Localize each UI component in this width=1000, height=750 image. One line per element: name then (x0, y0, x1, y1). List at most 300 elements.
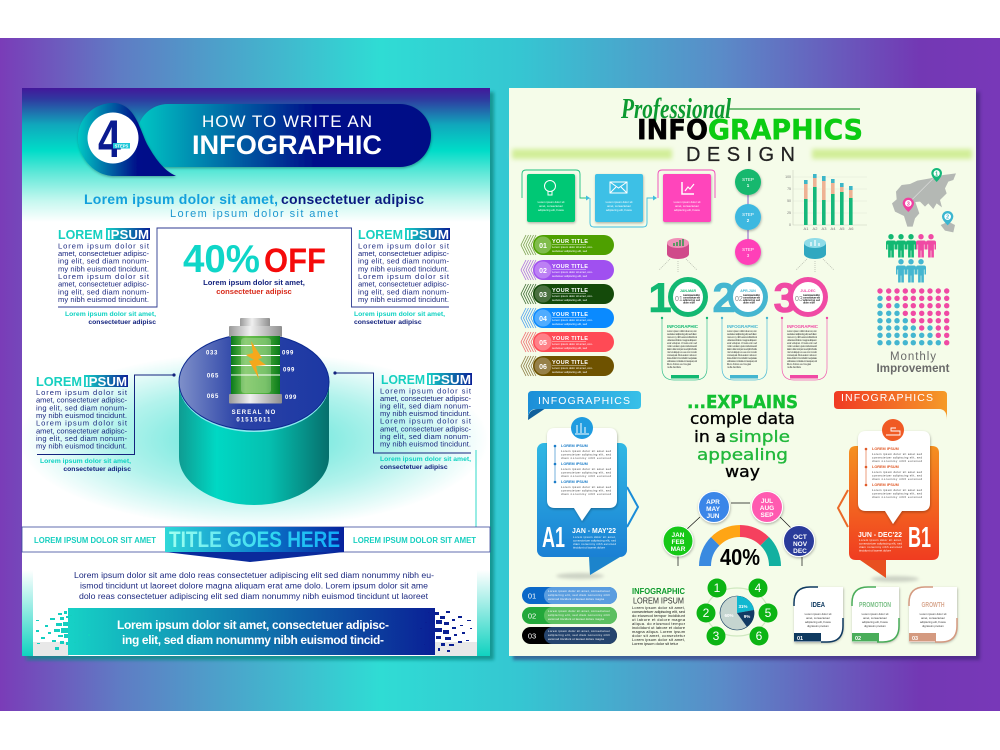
quarter bubbles and gauge: OCT (793, 534, 807, 541)
title band: LOREM IPSUM DOLOR SIT AMET (34, 536, 156, 545)
bar chart (785, 170, 867, 231)
leaf card: growth: amet, consectetuer (921, 616, 945, 620)
pie with six circles: 3 (713, 629, 720, 643)
card: A1: LOREM IPSUM (561, 480, 588, 484)
text block: middle right: amet, consectetuer adipisc- (380, 424, 471, 433)
card: B1: consectetuer adipiscing elit, sed (872, 492, 922, 496)
timeline cards: consequat. Duis autem vel eum (787, 353, 818, 357)
numbered list pills: euismod tincidunt ut laoreet dolore magna (548, 637, 604, 641)
steps: STEP (742, 247, 754, 252)
timeline cards: nisl ut aliquip ex ea commodo (727, 350, 758, 354)
infographic text block: ut labore et dolore magna (632, 617, 686, 622)
explains heading: simple (729, 427, 790, 446)
text block: middle right: Lorem ipsum dolor sit (380, 386, 472, 395)
title pills: Lorem ipsum dolor sit amet, con- (552, 270, 593, 274)
leaf card: growth: 03 (912, 636, 918, 642)
flow boxes: adipiscing elit, Fusce (606, 208, 632, 212)
title pills (521, 235, 614, 376)
timeline cards: minim veniam, quis nostrud exerci (667, 344, 697, 348)
title pills: YOUR TITLE (552, 239, 588, 245)
timeline cards: JAN-MAR (680, 289, 697, 293)
text block: top right: Lorem ipsum dolor sit amet, (354, 311, 445, 318)
bar chart: A3 (822, 226, 827, 231)
text block: middle left (36, 373, 176, 473)
timeline cards: Lorem ipsum dolor (683, 294, 700, 297)
title pills: 04 (539, 316, 547, 323)
cylinder with battery: SEREAL NO (232, 410, 276, 416)
infographic text block: incididunt ut labore et dolore (632, 625, 685, 630)
text block: top left: IPSUM (107, 227, 149, 242)
timeline cards: APR-JUN (740, 289, 756, 293)
flow boxes (522, 170, 715, 227)
subheading: Lorem ipsum dolor sit amet (170, 208, 338, 220)
text block: middle left: Lorem ipsum dolor sit (36, 388, 128, 397)
timeline cards: ut laoreet dolore magna aliquam (787, 338, 818, 342)
title pills: 02 (539, 268, 547, 275)
bar chart: 0 (789, 223, 791, 227)
people pictogram (886, 234, 936, 282)
card: B1: consectetuer adipiscing elit, sed (872, 474, 922, 478)
text block: top right (354, 227, 450, 326)
text block: top left: Lorem ipsum dolor sit amet, (65, 311, 156, 318)
timeline cards: ut laoreet dolore magna aliquam (667, 338, 698, 342)
subheading: Lorem ipsum dolor sit amet, (84, 191, 278, 207)
title pills: Lorem ipsum dolor sit amet, con- (552, 366, 593, 370)
timeline cards: iriure dolor in hendrerit in vulputate (727, 356, 758, 360)
card: B1: JUN - DEC'22 (858, 532, 902, 539)
timeline cards: consectetuer elit (743, 296, 760, 300)
infographic text block: Lorem ipsum dolor sit amet, (632, 605, 685, 610)
subheading: consectetuer adipisc (281, 191, 424, 207)
text block: top left: amet, consectetuer adipisc- (58, 249, 149, 258)
timeline cards: consectetuer elit (683, 296, 700, 300)
panel: right poster (509, 88, 980, 660)
text block: top left: Lorem ipsum dolor sit (58, 242, 150, 250)
card: A1: LOREM IPSUM (561, 462, 588, 466)
leaf card: idea: dignissim pretium (807, 624, 830, 628)
connectors (37, 373, 471, 454)
map with pins: 1 (935, 171, 938, 177)
bar chart: A5 (840, 226, 845, 231)
timeline cards: sectetuer adipiscing elit, sed diam (787, 332, 818, 336)
title pills: YOUR TITLE (552, 360, 588, 366)
infographic text block: aliqua. do eiusmod tempor (632, 621, 686, 626)
timeline cards: minim veniam, quis nostrud exerci (787, 344, 817, 348)
map with pins: 2 (946, 215, 949, 221)
explains heading: in a (694, 427, 726, 446)
cylinder with battery (179, 318, 329, 505)
pie with six circles: 6 (756, 629, 763, 643)
text block: top left: my nibh euismod tincidunt. (58, 295, 149, 304)
cylinder with battery: 01515011 (236, 418, 272, 424)
pie with six circles: 60% (724, 613, 734, 618)
text block: middle right: amet, consectetuer adipisc- (380, 394, 471, 403)
timeline cards: 02 (735, 296, 743, 303)
text block: top left (58, 227, 156, 326)
timeline cards: consequat. Duis autem vel eum (727, 353, 758, 357)
numbered list pills: adipiscing elit, sed diam nonummy nibh (548, 613, 610, 617)
text block: top right: amet, consectetuer adipisc- (358, 249, 449, 258)
text block: middle left: Lorem ipsum dolor sit amet, (40, 458, 131, 465)
text block: middle left: ing elit, sed diam nonum- (36, 403, 127, 412)
title pills: 01 (539, 243, 547, 250)
title banner: STEPS (115, 144, 129, 148)
text block: top right: my nibh euismod tincidunt. (358, 264, 449, 273)
quarter bubbles and gauge (663, 492, 814, 570)
bar chart: 25 (787, 211, 791, 215)
discount callout: Lorem ipsum dolor sit amet, (203, 278, 305, 287)
numbered list pills: euismod tincidunt ut laoreet dolore magna (548, 617, 604, 621)
steps: 1 (747, 183, 750, 188)
bar chart: 100 (785, 175, 791, 179)
card: A1: consectetuer adipiscing elit, sed (573, 538, 616, 542)
quarter bubbles and gauge: JUN (706, 513, 720, 520)
explains heading: appealing (697, 445, 788, 464)
bar chart: 75 (787, 187, 791, 191)
timeline cards: INFOGRAPHIC (787, 324, 819, 329)
timeline cards: diam nibh (803, 302, 815, 304)
map with pins (892, 168, 956, 232)
numbered list pills: 02 (528, 612, 536, 620)
quarter bubbles and gauge: FEB (672, 539, 685, 546)
leaf card: promotion: PROMOTION (859, 600, 891, 609)
title pills: Lorem ipsum dolor sit amet, con- (552, 318, 593, 322)
numbered list pills: Lorem ipsum dolor sit amet, consectetuer (548, 629, 610, 633)
quarter bubbles and gauge: APR (706, 499, 720, 506)
numbered list pills: Lorem ipsum dolor sit amet, consectetuer (548, 609, 610, 613)
timeline cards: nulla facilisis (727, 365, 742, 369)
card: A1: A1 (542, 522, 565, 554)
cylinder with battery: 099 (282, 350, 294, 356)
infographic text block: dolor sit amet, consectetur (632, 633, 686, 638)
card: B1: Lorem ipsum dolor sit amet sed (872, 470, 922, 474)
title pills: sectetuer adipiscing elit, sed (552, 298, 588, 302)
title banner: 4 (98, 110, 121, 169)
text block: middle right: consectetuer adipisc (380, 464, 448, 471)
timeline cards: minim veniam, quis nostrud exerci (727, 344, 757, 348)
cylinder with battery: 099 (283, 368, 295, 374)
title band: TITLE GOES HERE (169, 527, 340, 552)
text block: middle left: amet, consectetuer adipisc- (36, 426, 127, 435)
card: A1 (528, 391, 641, 579)
steps (735, 169, 761, 265)
leaf card: idea: adipiscing elit, Fusce (805, 620, 831, 624)
flow boxes: amet, consectetuer (539, 204, 563, 208)
cylinder with battery: 033 (206, 350, 218, 356)
title pills: Lorem ipsum dolor sit amet, con- (552, 245, 593, 249)
timeline cards: 01 (675, 296, 683, 303)
timeline cards: Lorem ipsum dolor sit amet, con (727, 329, 758, 333)
card: B1: consectetuer adipiscing elit, sed (872, 456, 922, 460)
text block: middle left: Lorem ipsum dolor sit (36, 419, 128, 428)
leaf card: promotion: adipiscing elit, Fusce (862, 620, 888, 624)
text block: middle right: ing elit, sed diam nonum- (380, 432, 471, 441)
card: B1: tincidunt ut laoreet dolore (859, 548, 891, 552)
text block: top right: my nibh euismod tincidunt. (358, 295, 449, 304)
timeline cards: ut laoreet dolore magna aliquam (727, 338, 758, 342)
card: A1: tincidunt ut laoreet dolore (573, 546, 605, 550)
text block: top left: ing elit, sed diam nonum- (58, 257, 149, 266)
leaf card: idea: 01 (797, 636, 803, 642)
battery (229, 318, 282, 404)
timeline cards: sectetuer adipiscing elit, sed diam (667, 332, 698, 336)
discount callout: 40% (183, 238, 260, 281)
bar chart: 50 (787, 199, 791, 203)
discount callout (183, 238, 326, 296)
timeline cards: erat volutpat. Ut wisi enim ad (727, 341, 758, 345)
particles: teal (36, 611, 90, 650)
card: B1: Lorem ipsum dolor sit amet sed (872, 488, 922, 492)
timeline cards: diam nibh (743, 302, 755, 304)
quarter bubbles and gauge: MAR (671, 546, 686, 553)
timeline cards: adipiscing sed (743, 299, 760, 302)
text block: top left: my nibh euismod tincidunt. (58, 264, 149, 273)
numbered list pills (522, 587, 617, 644)
timeline cards: Lorem ipsum dolor sit amet, con (667, 329, 698, 333)
leaf card: idea (794, 587, 843, 642)
text block: middle left: IPSUM (85, 374, 127, 389)
timeline cards: nisl ut aliquip ex ea commodo (667, 350, 698, 354)
bar chart: A6 (849, 226, 854, 231)
timeline cards: iriure dolor in hendrerit in vulputate (667, 356, 698, 360)
title: DESIGN (686, 144, 795, 166)
text block: top right: consectetuer adipisc (354, 319, 422, 326)
numbered list pills: 01 (528, 592, 536, 600)
quarter bubbles and gauge: JUL (761, 498, 773, 505)
timeline cards: 3 (773, 274, 797, 321)
text block: top right: ing elit, sed diam nonum- (358, 287, 449, 296)
leaf card: promotion: dignissim pretium (864, 624, 887, 628)
card: A1: LOREM IPSUM (561, 444, 588, 448)
text block: top right: Lorem ipsum dolor sit (358, 272, 450, 281)
card: B1 (834, 391, 947, 582)
card: A1: Lorem ipsum dolor sit amet sed (561, 449, 611, 453)
subheading (84, 191, 424, 220)
cylinder with battery: 065 (207, 394, 219, 400)
text block: middle right: Lorem ipsum dolor sit amet, (380, 456, 471, 463)
bar chart: A4 (831, 226, 836, 231)
infographic text block: Lorem ipsum dolor sit amet, (632, 637, 685, 642)
timeline cards: INFOGRAPHIC (667, 324, 699, 329)
title pills: sectetuer adipiscing elit, sed (552, 249, 588, 253)
panel: left poster (19, 88, 494, 660)
timeline cards: velit esse molestie consequat, vel (727, 359, 757, 363)
timeline cards: sectetuer adipiscing elit, sed diam (727, 332, 758, 336)
timeline cards: Lorem ipsum dolor sit amet, con (787, 329, 818, 333)
bottom banner: ing elit, sed diam nonummy nibh euismod tincid- (122, 633, 384, 647)
timeline cards: Lorem ipsum dolor (743, 294, 760, 297)
title pills: sectetuer adipiscing elit, sed (552, 370, 588, 374)
title pills: sectetuer adipiscing elit, sed (552, 346, 588, 350)
quarter bubbles and gauge: DEC (793, 548, 807, 555)
card: B1: LOREM IPSUM (872, 465, 899, 469)
quarter bubbles and gauge: MAY (706, 506, 721, 513)
card: A1: JAN - MAY'22 (572, 528, 616, 535)
paragraph: ismod tincidunt ut laoreet dolore magna aliquam erat ame dolo. Lorem ipsum dolor sit ame (80, 580, 428, 590)
flow boxes: Lorem ipsum dolor sit (606, 200, 633, 204)
title pills: sectetuer adipiscing elit, sed (552, 274, 588, 278)
text block: middle left: consectetuer adipisc (63, 466, 131, 473)
flow boxes: amet, consectetuer (607, 204, 631, 208)
steps: 2 (747, 218, 750, 223)
timeline cards: consequat. Duis autem vel eum (667, 353, 698, 357)
steps: 3 (747, 253, 750, 258)
frame lines (58, 228, 449, 307)
numbered list pills: euismod tincidunt ut laoreet dolore magna (548, 597, 604, 601)
title (512, 93, 972, 166)
quarter bubbles and gauge: 40% (720, 544, 760, 570)
infographic text block: Lorem ipsum dolor sit tetur (632, 641, 679, 646)
card: B1: diam nonummy nibh euismod (872, 495, 922, 499)
cylinder with battery: 065 (207, 374, 219, 380)
timeline cards: diam nibh (683, 302, 695, 304)
leaf card: promotion (852, 587, 899, 642)
card: B1: INFOGRAPHICS (841, 392, 933, 404)
bar chart: A2 (813, 226, 818, 231)
leaf card: growth: adipiscing elit, Fusce (920, 620, 946, 624)
timeline cards: iriure dolor in hendrerit in vulputate (787, 356, 818, 360)
text block: middle right: my nibh euismod tincidunt. (380, 440, 471, 449)
pie with six circles (696, 578, 778, 646)
steps: STEP (742, 212, 754, 217)
bottom banner (68, 608, 435, 655)
text block: middle left: ing elit, sed diam nonum- (36, 434, 127, 443)
leaf card: idea: Lorem ipsum dolor sit (805, 612, 832, 616)
title pills: Lorem ipsum dolor sit amet, con- (552, 342, 593, 346)
timeline cards: consectetuer elit (803, 296, 820, 300)
leaf card: growth: GROWTH (922, 600, 944, 609)
title pills: 06 (539, 364, 547, 371)
text block: middle left: my nibh euismod tincidunt. (36, 442, 127, 451)
timeline cards: adipiscing sed (803, 299, 820, 302)
card: B1: Lorem ipsum dolor sit amet sed (872, 452, 922, 456)
leaf card: growth (909, 587, 957, 642)
timeline cards: nonummy nibh euismod tincidunt (727, 335, 757, 339)
card: A1: diam nonummy nibh euismod (573, 542, 616, 546)
title banner: INFOGRAPHIC (192, 130, 382, 160)
infographic text block: LOREM IPSUM (633, 596, 684, 606)
card: A1: diam nonummy nibh euismod (561, 492, 611, 496)
card: A1: Lorem ipsum dolor sit amet sed (561, 467, 611, 471)
explains heading (687, 392, 798, 481)
dot matrix (876, 288, 950, 375)
dot matrix: Improvement (876, 363, 950, 375)
card: A1: consectetuer adipiscing elit, sed (561, 452, 611, 456)
explains heading: comple data (690, 409, 795, 428)
glow behind cylinder (19, 352, 489, 528)
leaf card: promotion: amet, consectetuer (863, 616, 887, 620)
flow boxes: adipiscing elit, Fusce (538, 208, 564, 212)
infographic text block: INFOGRAPHIC (632, 586, 685, 596)
title banner: HOW TO WRITE AN (202, 112, 372, 131)
paragraph (74, 570, 434, 601)
pie with six circles: 2 (703, 606, 710, 620)
title band: LOREM IPSUM DOLOR SIT AMET (353, 536, 476, 545)
timeline cards: illum dolore eu feugiat (667, 362, 691, 366)
leaf card: promotion: Lorem ipsum dolor sit (862, 612, 889, 616)
title: GRAPHICS (708, 114, 863, 146)
explains heading: way (725, 462, 760, 481)
timeline cards: 2 (712, 274, 736, 321)
title banner (78, 103, 431, 176)
timeline cards: tation ullamcorper suscipit lobortis (727, 347, 758, 351)
timeline cards: illum dolore eu feugiat (787, 362, 811, 366)
card: A1: Lorem ipsum dolor sit amet, (573, 535, 616, 539)
text block: middle right: Lorem ipsum dolor sit (380, 417, 472, 426)
quarter bubbles and gauge: SEP (760, 512, 774, 519)
card: B1: LOREM IPSUM (872, 483, 899, 487)
timeline cards: tation ullamcorper suscipit lobortis (787, 347, 818, 351)
timeline cards: INFOGRAPHIC (727, 324, 759, 329)
timeline cards: nisl ut aliquip ex ea commodo (787, 350, 818, 354)
cylinder with battery: 099 (285, 395, 297, 401)
timeline cards: 1 (648, 274, 672, 321)
numbered list pills: 03 (528, 632, 536, 640)
numbered list pills: adipiscing elit, sed diam nonummy nibh (548, 633, 610, 637)
timeline cards: tation ullamcorper suscipit lobortis (667, 347, 698, 351)
title pills: YOUR TITLE (552, 312, 588, 318)
timeline cards (648, 274, 828, 380)
discount callout: OFF (264, 242, 326, 280)
flow boxes: adipiscing elit, Fusce (674, 208, 700, 212)
text block: top right: LOREM (358, 227, 403, 242)
leaf card: idea: IDEA (811, 600, 825, 609)
text block: middle right: ing elit, sed diam nonum- (380, 402, 471, 411)
text block: top left: Lorem ipsum dolor sit (58, 272, 150, 281)
card: A1: diam nonummy nibh euismod (561, 456, 611, 460)
timeline cards: erat volutpat. Ut wisi enim ad (787, 341, 818, 345)
flow boxes: amet, consectetuer (675, 204, 699, 208)
infographic text block: magna aliqua. Lorem ipsum (632, 629, 685, 634)
text block: top left: LOREM (58, 227, 103, 242)
text block: middle right (333, 371, 472, 471)
title band (22, 527, 490, 562)
text block: top right: IPSUM (406, 227, 449, 242)
quarter bubbles and gauge: NOV (793, 541, 808, 548)
paragraph: Lorem ipsum dolor sit ame dolo reas consectetuer adipiscing elit sed diam nonummy nibh eu- (74, 570, 434, 580)
card: A1: consectetuer adipiscing elit, sed (561, 488, 611, 492)
timeline cards: velit esse molestie consequat, vel (667, 359, 697, 363)
title pills: YOUR TITLE (552, 288, 588, 294)
title pills: 03 (539, 292, 547, 299)
leaf card: growth: dignissim pretium (922, 624, 945, 628)
card: B1: diam nonummy nibh euismod (872, 459, 922, 463)
text block: top left: amet, consectetuer adipisc- (58, 280, 149, 289)
card: B1: LOREM IPSUM (872, 447, 899, 451)
discount callout: consectetuer adipisc (216, 287, 292, 296)
timeline cards: JUL-DEC (800, 289, 816, 293)
title: Professional (620, 93, 732, 125)
bar chart: A1 (804, 226, 809, 231)
timeline cards: illum dolore eu feugiat (727, 362, 751, 366)
infographic text block (632, 586, 686, 646)
card: A1: INFOGRAPHICS (538, 395, 630, 407)
text block: middle right: my nibh euismod tincidunt. (380, 409, 471, 418)
text block: middle left: LOREM (36, 374, 82, 389)
leaf card: growth: Lorem ipsum dolor sit (920, 612, 947, 616)
pie with six circles: 31% (738, 604, 748, 609)
infographic text block: consectetuer adipiscing elit, sed (632, 609, 685, 614)
card: B1: diam nonummy nibh euismod (859, 545, 902, 549)
leaf card: promotion: 02 (855, 636, 861, 642)
timeline cards: 03 (795, 296, 803, 303)
card: B1: B1 (908, 522, 931, 554)
text block: middle right: IPSUM (428, 372, 471, 387)
quarter bubbles and gauge: AUG (760, 505, 774, 512)
text block: middle left: my nibh euismod tincidunt. (36, 411, 127, 420)
steps: STEP (742, 177, 754, 182)
timeline cards: Lorem ipsum dolor (803, 294, 820, 297)
